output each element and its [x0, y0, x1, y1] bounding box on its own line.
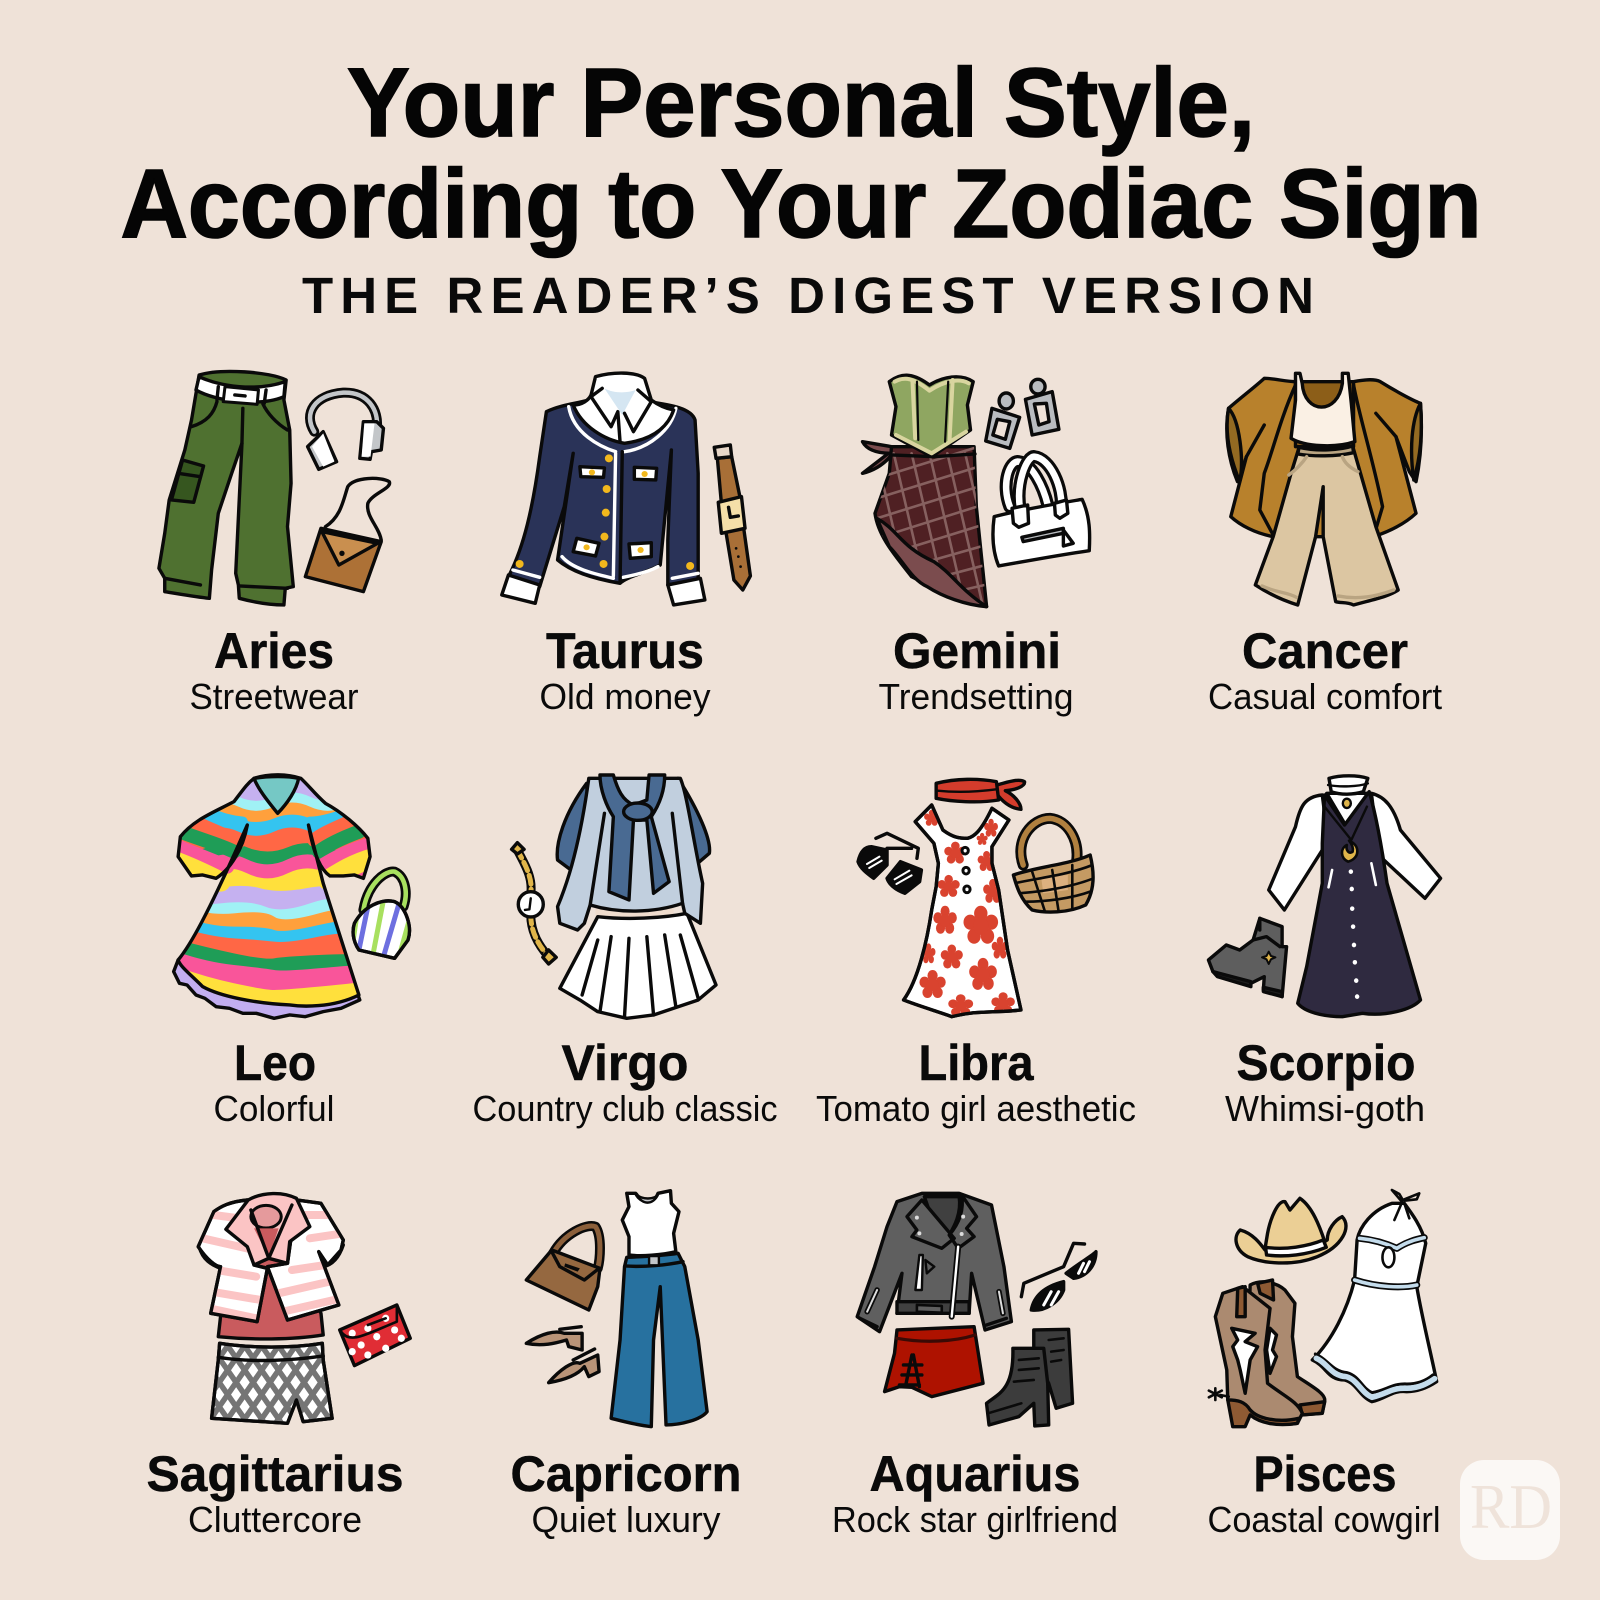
style: Coastal cowgirl: Coastal cowgirl	[1208, 1499, 1440, 1540]
outfit: Aquarius	[857, 1193, 1096, 1426]
icon: black sunglasses	[858, 833, 921, 893]
sign name: Pisces: Pisces	[1254, 1446, 1396, 1502]
outfit: Aries	[159, 371, 390, 605]
logo: RD badge	[1460, 1460, 1560, 1560]
icon: navy sweater sleeves	[557, 778, 710, 872]
style: Country club classic: Country club classic	[472, 1088, 778, 1129]
icon: collar and moon necklace	[1325, 776, 1368, 862]
icon: headphones	[308, 393, 383, 469]
sign name: Gemini: Gemini	[893, 623, 1061, 679]
style: Rock star girlfriend: Rock star girlfriend	[832, 1499, 1118, 1540]
icon: light blue blouse	[558, 778, 703, 930]
icon: polka dot clutch	[340, 1305, 410, 1366]
outfit: Cancer	[1227, 373, 1421, 605]
icon: tweed jacket	[502, 373, 705, 605]
panel: Aquarius	[832, 1193, 1118, 1540]
panel: Leo	[167, 770, 410, 1129]
icon: striped bag	[352, 872, 410, 958]
sign name: Taurus: Taurus	[546, 623, 704, 679]
icon: tomato print dress	[904, 805, 1021, 1017]
icon: grey ankle boots	[1208, 918, 1287, 997]
outfit: Sagittarius	[196, 1192, 412, 1425]
outfit: Virgo	[512, 775, 716, 1018]
sign name: Aries: Aries	[214, 623, 334, 679]
sign name: Cancer: Cancer	[1242, 623, 1408, 679]
outfit: Gemini	[858, 375, 1090, 607]
panel: Sagittarius	[146, 1194, 410, 1540]
panel: Cancer	[1208, 373, 1442, 717]
icon: green corset	[889, 375, 973, 457]
icon: rainbow dress	[167, 770, 381, 1023]
outfit: Taurus	[502, 373, 750, 605]
icon: blue wide-leg jeans	[611, 1253, 707, 1427]
sign name: Sagittarius: Sagittarius	[146, 1446, 404, 1502]
sign name: Libra: Libra	[918, 1035, 1035, 1091]
panel: Scorpio	[1208, 776, 1441, 1129]
panel: Taurus	[502, 373, 750, 717]
icon: gingham shorts	[210, 1342, 334, 1425]
style: Whimsi-goth: Whimsi-goth	[1225, 1088, 1425, 1129]
sign name: Scorpio: Scorpio	[1236, 1035, 1416, 1091]
icon: pleated white skirt	[560, 913, 716, 1018]
panel: Virgo	[472, 775, 778, 1129]
panel: Libra	[816, 779, 1136, 1129]
icon: cowgirl boots	[1209, 1280, 1325, 1427]
style: Streetwear: Streetwear	[190, 676, 359, 717]
icon: geometric earrings	[986, 379, 1059, 448]
outfit: Scorpio	[1208, 776, 1441, 1017]
panel: Gemini	[858, 375, 1090, 717]
icon: lattice skirt	[858, 442, 1001, 607]
title: Your Personal Style,	[347, 48, 1255, 157]
logo: RD badge: RD	[1470, 1471, 1552, 1542]
style: Cluttercore: Cluttercore	[188, 1499, 362, 1540]
style: Old money: Old money	[540, 676, 710, 717]
outfit: Libra	[858, 779, 1094, 1017]
icon: white tank top	[1291, 373, 1355, 446]
icon: white halter dress	[1312, 1190, 1437, 1402]
icon: kimono cardigan	[1227, 378, 1421, 537]
icon: striped shirt	[198, 1194, 343, 1322]
icon: white tank top	[622, 1191, 679, 1256]
panel: Aries	[159, 371, 390, 717]
icon: gold chain watch	[512, 843, 556, 964]
subtitle: THE READER’S DIGEST VERSION	[302, 267, 1314, 324]
style: Casual comfort: Casual comfort	[1208, 676, 1442, 717]
sign name: Aquarius: Aquarius	[870, 1446, 1080, 1502]
icon: crossbody bag	[305, 478, 390, 592]
icon: red headband	[936, 779, 1025, 809]
outfit: Pisces	[1209, 1190, 1437, 1427]
icon: wide-leg trousers	[1255, 446, 1398, 605]
sign name: Virgo: Virgo	[562, 1035, 688, 1091]
icon: waist gap	[596, 907, 674, 918]
panel: Pisces	[1208, 1190, 1440, 1540]
icon: cowgirl hat	[1236, 1198, 1346, 1263]
outfit: Capricorn	[526, 1191, 707, 1427]
icon: cargo pants	[159, 371, 293, 605]
icon: platform boots	[987, 1329, 1073, 1426]
style: Tomato girl aesthetic: Tomato girl aesthetic	[816, 1088, 1136, 1129]
icon: knotted scarf	[600, 775, 669, 900]
panel: Capricorn	[510, 1191, 742, 1540]
style: Trendsetting: Trendsetting	[878, 676, 1074, 717]
style: Quiet luxury: Quiet luxury	[532, 1499, 720, 1540]
icon: red top	[218, 1228, 323, 1339]
icon: red mini skirt	[885, 1327, 983, 1397]
icon: brown handbag	[526, 1226, 600, 1310]
title	[120, 48, 1482, 258]
icon: wicker basket	[1013, 818, 1094, 913]
sign name: Capricorn: Capricorn	[510, 1446, 742, 1502]
outfit: Leo	[167, 770, 410, 1023]
icon: sunglasses	[1021, 1243, 1096, 1310]
icon: white handbag	[993, 457, 1090, 566]
icon: white blouse	[1269, 793, 1441, 910]
icon: nude heels	[526, 1327, 599, 1383]
title: According to Your Zodiac Sign	[120, 149, 1482, 258]
icon: dark pinafore dress	[1298, 792, 1420, 1017]
style: Colorful: Colorful	[214, 1088, 334, 1129]
sign name: Leo: Leo	[234, 1035, 316, 1091]
icon: wristwatch	[714, 445, 750, 590]
icon: leather jacket	[857, 1193, 1011, 1332]
